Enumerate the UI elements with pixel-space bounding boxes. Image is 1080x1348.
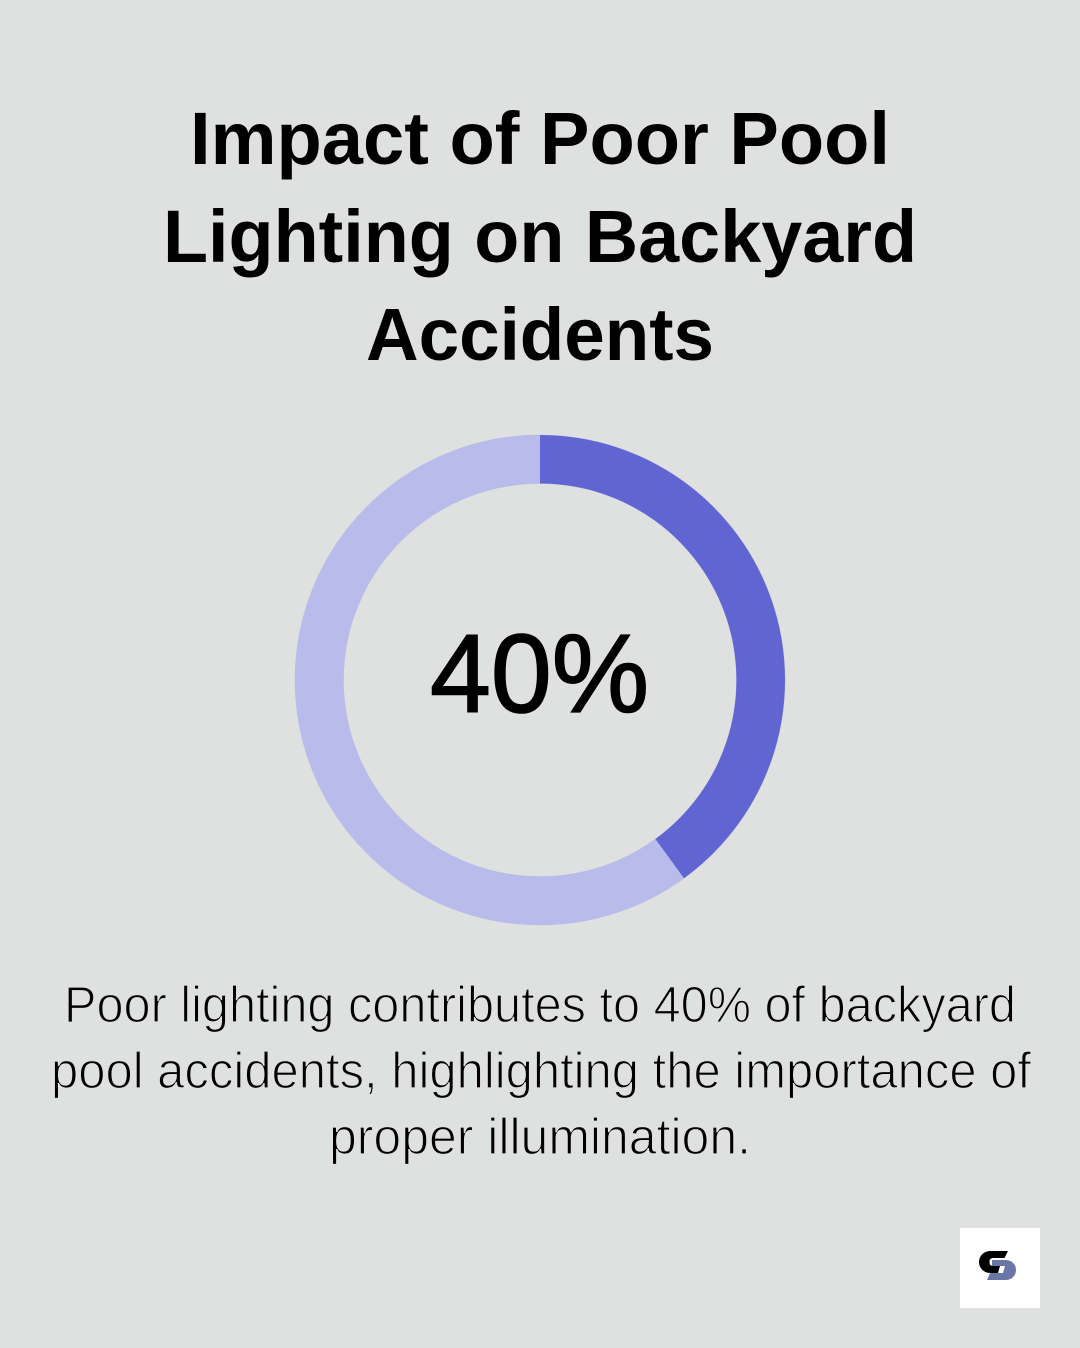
description text: proper illumination. xyxy=(329,1108,751,1165)
title: Lighting on Backyard xyxy=(163,195,917,278)
description text xyxy=(51,976,1032,1165)
donut value: 40% xyxy=(430,612,649,736)
title: Accidents xyxy=(366,293,714,376)
description text: Poor lighting contributes to 40% of backyard xyxy=(64,976,1016,1033)
donut highlighted segment xyxy=(540,435,785,878)
description text: pool accidents, highlighting the importance of xyxy=(51,1042,1032,1099)
title xyxy=(163,97,917,376)
donut track xyxy=(319,459,761,901)
title: Impact of Poor Pool xyxy=(190,97,890,180)
icon: logo mark xyxy=(979,1251,1016,1280)
logo badge xyxy=(960,1228,1040,1308)
donut chart: 40% xyxy=(319,435,785,901)
